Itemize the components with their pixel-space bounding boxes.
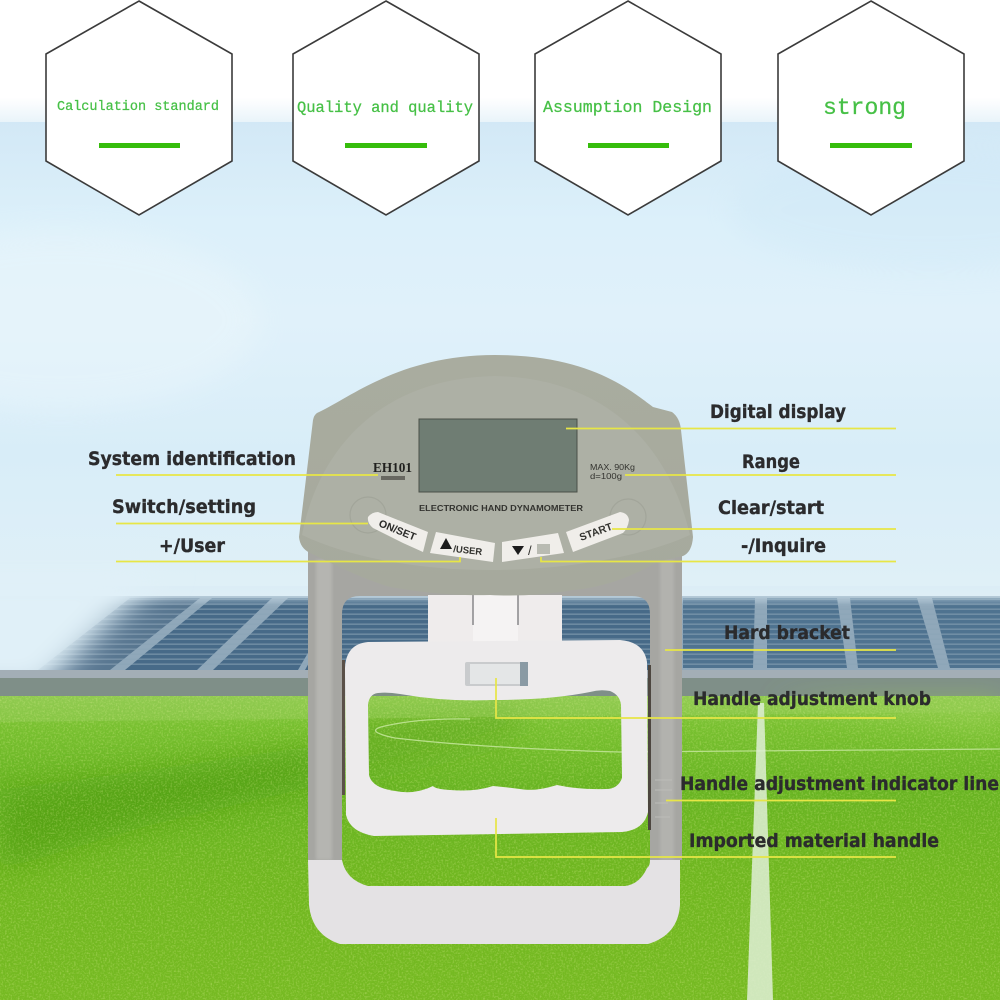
button: up/user: /USER (453, 544, 483, 558)
hexagon: assumption design (535, 1, 721, 215)
hexagon: calculation standard (46, 1, 232, 215)
label: imported material handle (496, 818, 939, 857)
hexagon text: Calculation standard (57, 100, 219, 115)
background: stadium stands (0, 570, 1000, 696)
label: system identification: System identification (88, 448, 296, 470)
model sublabel (381, 476, 405, 480)
label: imported material handle: Imported material handle (689, 830, 939, 852)
handle (345, 640, 648, 836)
button: on/set (368, 512, 428, 552)
label: range: Range (742, 451, 800, 473)
hexagon: strong (778, 1, 964, 215)
button: start: START (578, 521, 615, 544)
device frame arms (308, 540, 682, 860)
label: hard bracket: Hard bracket (724, 622, 850, 644)
label: switch/setting: Switch/setting (112, 496, 256, 518)
hexagon text: Quality and quality (297, 99, 473, 117)
range text: d=100g (590, 471, 622, 481)
white bottom grip (308, 860, 680, 944)
label: handle adjustment knob: Handle adjustment knob (693, 688, 931, 710)
adjustment knob (465, 662, 528, 686)
LCD display (419, 419, 577, 492)
button recesses (350, 497, 646, 535)
button: start (566, 512, 629, 552)
label: +/user: +/User (159, 535, 226, 557)
green bar (830, 143, 912, 148)
button: on/set: ON/SET (377, 518, 418, 544)
button: down/inquire: / (528, 543, 532, 558)
label: handle adjustment knob (496, 678, 931, 718)
green bar (588, 143, 669, 148)
label: clear/start: Clear/start (718, 497, 824, 519)
range text (590, 462, 635, 481)
label: +/user (116, 535, 460, 562)
hexagon text: strong (823, 95, 906, 121)
dynamometer device (299, 355, 693, 944)
background: grass field (0, 696, 1000, 1000)
background: sky (0, 0, 1000, 598)
range text: MAX. 90Kg (590, 462, 635, 472)
stem bracket (428, 595, 562, 665)
green bar (345, 143, 427, 148)
hexagon: quality and quality (293, 1, 479, 215)
label: -/inquire (541, 535, 896, 562)
device head (299, 355, 693, 595)
hexagon text: Assumption Design (543, 98, 712, 117)
button: down/inquire (502, 533, 564, 562)
green bar (99, 143, 180, 148)
button: up/user (430, 532, 495, 562)
label: digital display: Digital display (710, 401, 847, 423)
label: -/inquire: -/Inquire (741, 535, 826, 557)
device title: ELECTRONIC HAND DYNAMOMETER (419, 503, 584, 513)
model label: EH101 (373, 460, 412, 475)
